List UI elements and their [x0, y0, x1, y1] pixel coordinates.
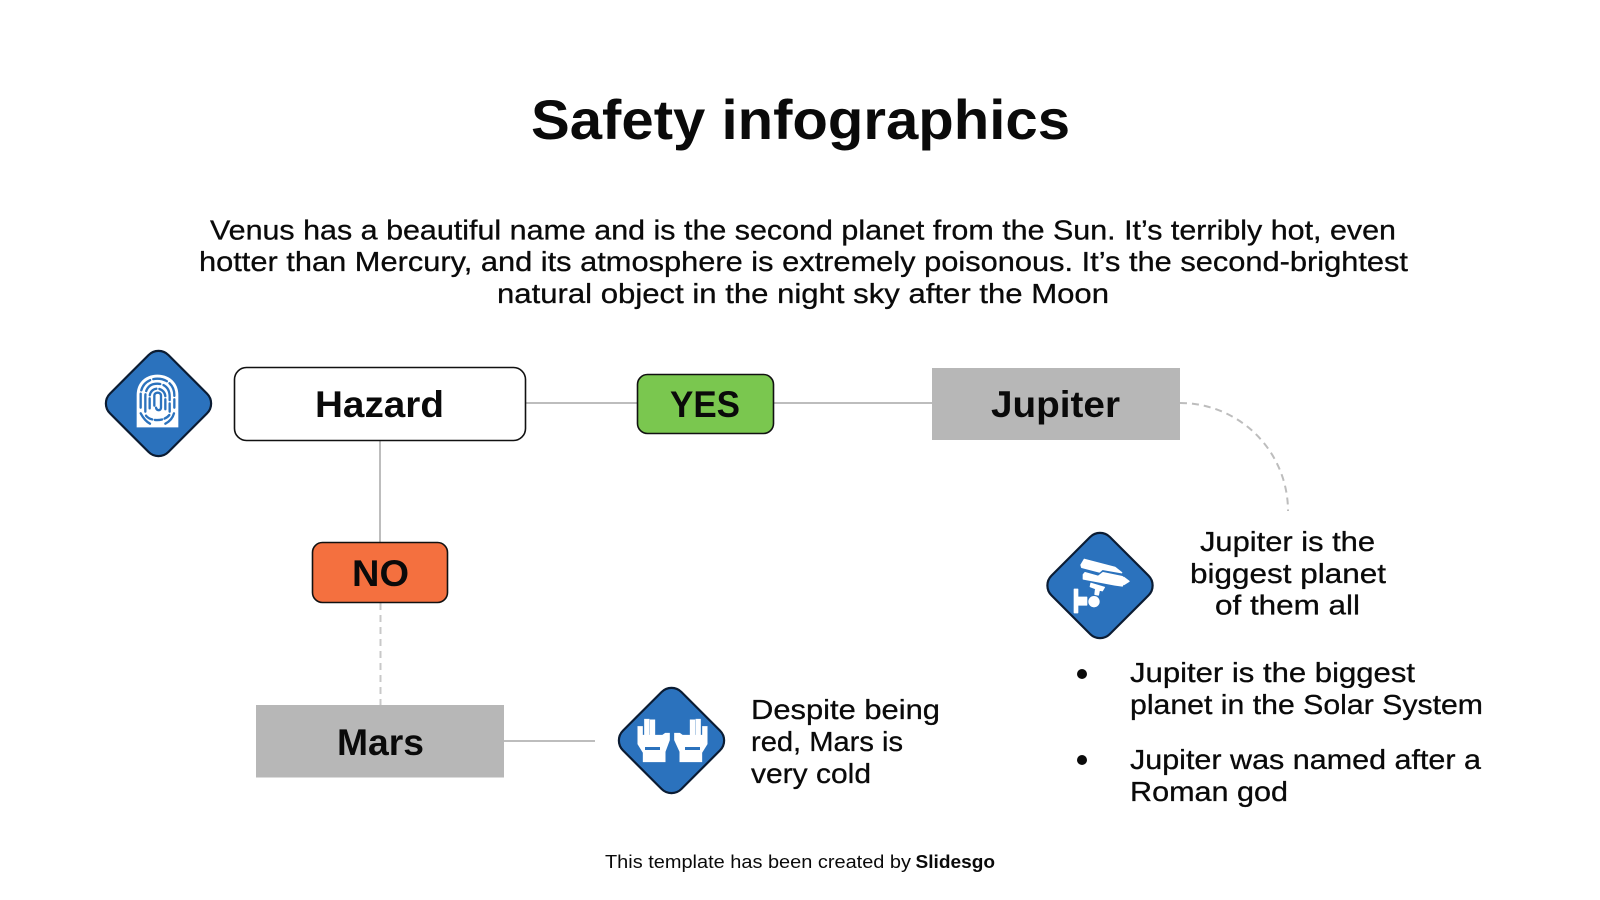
- box: Hazard: [234, 368, 526, 440]
- description: Jupiter: [1190, 526, 1386, 620]
- connector: Hazard to YES to Jupiter: [526, 402, 932, 404]
- intro text block: hotter than Mercury, and its atmosphere is extremely poisonous. It’s the second-brightest: [199, 246, 1408, 277]
- intro text block: [199, 214, 1408, 309]
- connector: NO to Mars (dashed): [380, 603, 382, 705]
- description: Mars: [751, 694, 940, 789]
- box: Mars: [256, 705, 504, 778]
- connector: Hazard to NO: [379, 441, 381, 542]
- icon: security camera diamond: [1042, 527, 1158, 644]
- description: Jupiter: Jupiter is the: [1200, 526, 1375, 557]
- connector: Mars to gloves icon: [504, 740, 595, 742]
- description: Jupiter: of them all: [1215, 590, 1360, 620]
- badge: YES: YES: [670, 384, 740, 425]
- description: Mars: very cold: [751, 758, 871, 789]
- badge: YES: [638, 374, 774, 434]
- connector: Jupiter to description (dashed arc): [1180, 403, 1288, 511]
- box: Jupiter: Jupiter: [991, 384, 1120, 425]
- title: Safety infographics: [531, 88, 1070, 151]
- bullet list: Jupiter facts: Jupiter was named after a: [1130, 744, 1481, 775]
- icon: fingerprint diamond: [100, 345, 217, 462]
- box: Mars: Mars: [337, 722, 424, 763]
- bullet list: Jupiter facts: Jupiter is the biggest: [1130, 657, 1415, 688]
- intro text block: Venus has a beautiful name and is the second planet from the Sun. It’s terribly hot, even: [210, 214, 1396, 246]
- footer credit: Slidesgo: [916, 852, 995, 872]
- badge: NO: NO: [352, 553, 409, 594]
- bullet list: Jupiter facts: [1077, 657, 1483, 807]
- description: Mars: Despite being: [751, 694, 940, 725]
- bullet list: Jupiter facts: planet in the Solar System: [1130, 689, 1483, 720]
- description: Mars: red, Mars is: [751, 726, 903, 757]
- intro text block: natural object in the night sky after the Moon: [497, 278, 1109, 309]
- badge: NO: [312, 542, 448, 602]
- box: Hazard: Hazard: [315, 384, 444, 425]
- description: Jupiter: biggest planet: [1190, 558, 1386, 589]
- icon: gloves diamond: [613, 682, 730, 799]
- box: Jupiter: [932, 368, 1180, 440]
- bullet list: Jupiter facts: Roman god: [1130, 776, 1288, 807]
- footer credit: This template has been created by: [605, 852, 911, 872]
